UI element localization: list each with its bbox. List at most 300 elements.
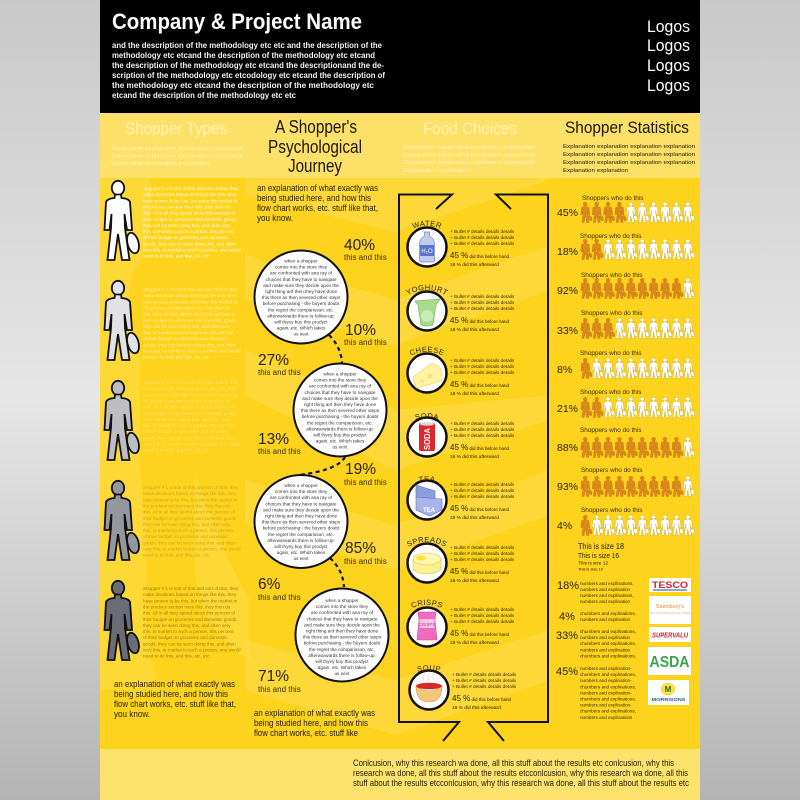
text: shopper 2: of their budget on groceries and domestic [143,336,228,341]
stat: 19% [344,461,387,487]
explanation: shopper types footer: being studied here, and how this [114,689,228,700]
text: shopper 4: their budget on groceries and domestic goods, [143,516,238,521]
text: shopper 3: this, to market to such a person, this percent [143,423,234,428]
retail stat: 33% [556,629,636,658]
food: water: WATER [412,220,442,228]
food: soup: 45 % [452,694,470,703]
food: cheese: 18 % did this afterward [450,391,499,397]
explanation: food choices: Explanation explanation [404,168,470,174]
stat row: 45% [557,195,695,222]
logo: supervalu: SUPERVALU [652,630,688,640]
circle: step 3: us next [293,556,309,561]
stat row: 93%: Shoppers who do this [581,467,642,474]
stat: 6% [258,576,301,602]
food: soda: + Bullet # details details details [450,421,515,426]
panel: shopper statistics [556,195,695,720]
retail stat: 45%: numbers and explination- [580,690,632,695]
circle: step 3: will thyey buy this prodyct [274,544,328,549]
logo: asda: ASDA [650,654,690,671]
circle: step 1: us next [293,332,309,337]
circle: step 4: again, etc. Which takes [318,665,367,670]
circle: step 1: comes into the store they [275,265,328,270]
explanation: shopper types footer [114,679,236,720]
food: water: H₂O [421,249,433,255]
text: shopper 5: have proven to be this, but when the market in [143,598,238,603]
food: soup: 18 % did this afterward [452,705,501,711]
food: soup [408,665,517,711]
text: shopper 4: need to do this, and this, etc, etc. [143,553,210,558]
icon: shopper 1 [104,181,141,260]
circle: step 4: choices that they have to navigate [307,616,378,621]
circle: step 3: right thing anf then they have done [265,514,337,518]
text: shopper 2: have proven to be this, but when the market in [143,299,238,304]
text: shopper 2: this, to market to such a person, this percent [143,330,234,335]
explanation: shopper types footer: an explanation of what exactly was [114,679,235,690]
stat: 27% [258,352,301,377]
stat row: 18%: 18% [557,246,578,258]
icon: shopper 4 [104,481,141,560]
description: and the description of the methodology etc etc and the description of the [112,40,382,50]
logos placeholder: Logos [647,36,690,55]
text: shopper 1: they can be seen doing this, and often very [143,223,231,228]
retail stat: 33%: chumbers and explinations, [580,629,636,634]
text: shopper 4: make decisions based on things like this, they [143,491,237,496]
circle: step 4: the regret the comparisson, etc. [309,647,375,652]
text: shopper 4: of their budget on groceries and domestic [143,534,228,539]
explanation: shopper statistics: Explanation explanation explanation explanation [563,152,695,158]
stat row: 8% [557,350,695,378]
circle: step 4: will thyey buy this prodyct [315,659,369,664]
circle: step 3: before purchasing - the buyers doubt [263,526,340,531]
text: shopper 3: this. All in all they spend about this percent of [143,405,236,410]
retail stat: 45%: chumbers and explinations, [580,684,636,689]
text: shopper 1: have proven to be this, but when the market in [143,198,238,203]
title: Company & Project Name [112,9,362,34]
circle: step 2: the regret the comparisson, etc. [307,420,373,425]
stat row: 45%: Shoppers who do this [582,195,643,202]
food: cheese: 45 % [450,380,468,389]
retail stat: 45%: chumbers and explinations, [580,709,636,714]
logo: tesco: TESCO [652,580,688,591]
text: shopper 1: Shopper # 1 is sort of this and sort of that, they [143,186,239,191]
circle: step 1: the regret the comparisson, etc. [268,307,334,312]
text: shopper 5: this, to market to such a person, this percent [143,629,234,634]
food: crisps: did this before hand [468,632,510,637]
explanation: shopper types [111,146,243,167]
food: soda: did this before hand [468,446,510,451]
logo: supervalu [649,627,691,642]
text: shopper 3: goods, they can be seen doing this, and often [143,435,236,440]
food: cheese: + Bullet # details details details [450,370,515,375]
circle: step 4 [296,588,388,682]
food: cheese: CHEESE [410,346,444,356]
stat: 85% [344,540,387,566]
circle: step 4: us next [334,671,350,676]
text: shopper 2: their budget on groceries and domestic goods, [143,318,238,323]
text: shopper 2: goods, they can be seen doing this, and often [143,342,236,347]
food: soda: + Bullet # details details details [450,433,515,438]
circle: step 2: again, etc. Which takes [316,439,365,444]
stat: 13%: this and this [258,447,301,456]
conclusion band [100,749,700,800]
explanation: journey intro: being studied here, and how this [257,193,371,204]
retail stat: 18%: numbers and explinations, [580,593,634,598]
icon: shopper 5 [104,581,141,660]
food: spreads [406,537,515,584]
logos placeholder: Logos [647,17,690,36]
food: crisps: CRISPS [411,600,442,608]
icon: shopper 2 [104,281,141,360]
food: soda: 18 % did this afterward [450,454,499,460]
stat row: 4%: Shoppers who do this [581,507,642,514]
food: spreads: did this before hand [468,570,510,575]
text: shopper 5: the produce section rises this, they then do [143,604,231,609]
icon: shopper 3 [104,381,141,460]
food: cheese [406,346,515,397]
food: yoghurt: did this before hand [468,319,510,324]
heading: food choices: Food Choices [423,119,517,138]
stat row: 18% [557,233,695,259]
circle: step 3: and make sure they decide upon the [263,507,339,512]
retail stat: 33%: chumbers and explinations, [580,641,636,646]
retail stat: 45%: numbers and explination- [580,678,632,683]
stat: 27%: this and this [258,368,301,377]
text: shopper 3: Shopper # 1 is sort of this and sort of that, they [143,380,239,385]
circle: step 3: the regret the comparisson, etc. [268,532,334,537]
text: shopper 5: very this, to market to such a person, one would [143,648,241,652]
stat: 13% [258,431,301,456]
retail stat: 18%: 18% [557,580,579,592]
stat row: 92%: 92% [557,285,578,297]
retail stat: 4%: numbers and explination [580,617,630,622]
logo: asda [648,647,691,675]
stat row: 21% [557,389,695,417]
text: shopper 3: the produce section rises this, they then do [143,398,231,403]
stat: 10%: 10% [345,322,376,339]
retail stat: 4%: 4% [559,611,575,623]
explanation: journey footer [254,708,375,739]
stat: 6%: this and this [258,593,301,602]
text: shopper 3: need to do this, and this, etc, etc. [143,448,210,453]
conclusion text: Conlcusion, why this research wa done, all this stuff about the results etc conlcusion, why this [353,758,674,768]
stat row: 88% [557,427,695,457]
retail stat: 33%: chumbers and explinations, [580,653,636,658]
explanation: shopper types footer: you know. [114,709,150,720]
retail stat: 4%: chumbers and explinations, [580,611,636,616]
type size samples: This is size 12 [578,560,608,566]
heading: psychological journey: Psychological [268,137,362,157]
text: shopper 1: goods, they can be seen doing this, and often [143,241,236,246]
text: shopper 2: make decisions based on things like this, they [143,293,237,298]
food: tea [406,476,515,521]
explanation: food choices: Explanation explanation explanation explanation [404,145,535,151]
text: shopper 1: this. All in all they spend about this percent of [143,211,236,216]
food: spreads: 45 % [450,567,468,576]
description: scription of the methodology etc etcodology etc etcand the description of [112,70,385,80]
stat row: 8%: Shoppers who do this [580,350,641,357]
retail stat: 45%: chumbers and explinations, [580,672,636,677]
food: yoghurt: 45 % [450,316,468,325]
stat: 85%: this and this [344,557,387,566]
retail stat: 33%: numbers and explination [580,635,630,640]
food: spreads: + Bullet # details details details [450,545,515,550]
text: shopper 3: their budget on groceries and domestic goods, [143,411,238,416]
explanation: food choices [404,145,535,174]
food: soda [406,413,515,460]
retail stat: 45%: numbers and explination- [580,703,632,708]
stat row: 21%: Shoppers who do this [580,389,641,396]
food: water: + Bullet # details details details [450,229,515,234]
food: tea: 18 % did this afterward [450,515,499,521]
text: shopper 2: the produce section rises this, they then do [143,305,231,310]
text: shopper 3: of their budget on groceries and domestic [143,429,228,434]
type size samples [578,541,624,572]
circle: step 4: comes into the store they [316,604,369,609]
explanation: shopper types: Explanation explanation explanation [111,161,210,167]
explanation: shopper types footer: flow chart works, etc. stuff like that, [114,699,236,710]
stat row: 18%: Shoppers who do this [580,233,641,240]
retail stat: 45%: 45% [556,666,578,678]
text: shopper 4: Shopper # 1 is sort of this and sort of that, they [143,485,239,490]
explanation: shopper statistics [563,144,695,174]
stat: 40%: this and this [344,253,387,262]
text: shopper 4: this, to market to such a person, this percent [143,528,234,533]
text: shopper 5: of their budget on groceries and domestic [143,635,228,640]
circle: step 4: and make sure they decide upon the [304,622,380,627]
retail stat: 45%: numbers and explinations [580,715,633,720]
text: shopper 2: need to do this, and this, etc, etc. [143,355,210,360]
circle: step 2: choices that they have to navigate [305,390,376,395]
stat row: 88%: Shoppers who do this [580,427,641,434]
circle: step 4: when a shopper [325,598,359,603]
food: cheese: + Bullet # details details details [450,364,515,369]
circle: step 1: afterwarwards there is follow-up: [267,313,335,318]
circle: step 3 [254,475,348,568]
circle: step 3: afterwarwards there is follow-up: [267,538,335,543]
food: spreads: + Bullet # details details details [450,557,515,562]
text: shopper 1: the produce section rises this, they then do [143,204,231,209]
conclusion text: stuff about the results etcconlcusion, why this research wa done, all this stuff about the results etc [353,778,689,788]
description: the methodology etc etcand the description of the methodology etc [112,80,374,90]
text: shopper 1: of their budget on groceries and domestic [143,235,228,240]
explanation: journey footer: being studied here, and how this [254,718,368,729]
food: soup: + Bullet # details details details [452,684,517,689]
food: cheese: did this before hand [468,383,510,388]
food: crisps: + Bullet # details details details [450,607,515,612]
circle: step 2: us next [332,445,348,450]
logo: morrisons [648,680,689,705]
stat: 10%: this and this [344,338,387,347]
food: crisps: 18 % did this afterward [450,640,499,646]
circle: step 2: when a shopper [323,372,357,376]
logos placeholder: Logos [647,56,690,75]
description [112,40,385,100]
panel: shopper types [104,181,241,720]
stat row: 33%: 33% [557,325,578,337]
logo: morrisons: MORRISONS [652,697,686,702]
stat: 40%: 40% [344,237,375,254]
food: water: + Bullet # details details details [450,241,515,246]
circle: step 2: will thyey buy this prodyct [313,432,367,438]
conclusion text: research wa done, all this stuff about the results etcconlcusion, why this research wa done, all this [353,768,688,778]
food: tea: + Bullet # details details details [450,494,515,499]
circle: step 3: again, etc. Which takes [277,550,326,555]
background stripes [245,178,550,735]
circle: step 2 [294,364,386,456]
text: shopper 2: very this, to market to such a person, one would [143,348,241,354]
text: shopper 5: make decisions based on things like this, they [143,592,237,597]
retail stat: 18%: numbers and explination [580,587,630,592]
heading: psychological journey [268,117,362,176]
circle: step 2: comes into the store they [314,378,367,383]
circle: step 1: will thyey buy this prodyct [274,320,328,324]
faint silhouette in shopper types column [100,178,250,690]
circle: step 2: afterwarwards there is follow-up: [306,426,374,431]
explanation: journey footer: an explanation of what exactly was [254,708,375,719]
stat: 85%: 85% [345,540,376,557]
text: shopper 3: make decisions based on things like this, they [143,386,237,391]
circle: step 2: right thing anf then they have done [304,402,376,407]
panel: food choices frame [398,194,549,742]
stat row: 33% [557,310,695,338]
food: yoghurt: YOGHURT [406,284,448,294]
circle: step 1 [254,250,348,344]
stat row: 4%: 4% [557,520,572,532]
stat: 6%: 6% [258,576,281,593]
retail stat: 18%: numbers and explinations, [580,581,634,586]
text: shopper 1: need to do this, and this, etc, etc. [143,254,210,259]
food: soup: did this before hand [470,697,512,702]
main yellow panel [100,113,700,800]
stat row: 92% [557,272,695,298]
food: tea: TEA [423,508,436,514]
food: water: 45 % [450,251,468,260]
heading: psychological journey: A Shopper's [275,117,357,137]
explanation: journey intro [257,183,378,224]
circle: step 4: before purchasing - the buyers doubt [304,641,381,646]
stat row: 4% [557,507,695,535]
circle: step 1: before purchasing - the buyers doubt [263,301,340,306]
text: shopper 5: this. All in all they spend about this percent of [143,611,236,616]
food: crisps: + Bullet # details details details [450,619,515,624]
stat: 10% [344,322,387,347]
stat row: 8%: 8% [557,364,572,376]
dotted connectors [299,335,345,587]
explanation: shopper statistics: Explanation explanation [563,168,628,174]
retail stat: 18% [557,580,634,604]
circle: step 4: right thing anf then they have done [306,628,378,634]
food: crisps: 45 % [450,629,468,638]
food: water: did this before hand [468,254,510,259]
panel: psychological journey flow [254,183,388,739]
circle: step 3: are confronted with ana ray of [270,495,333,500]
food: yoghurt: + Bullet # details details details [450,294,515,299]
food: yoghurt: 18 % did this afterward [450,327,499,333]
explanation: journey footer: flow chart works, etc. stuff like [254,728,358,739]
heading: shopper types: Shopper Types [125,119,227,138]
food: spreads: 18 % did this afterward [450,578,499,584]
logos placeholder [647,17,690,95]
header band [100,113,700,178]
conclusion text [353,758,689,788]
food: soda: + Bullet # details details details [450,427,515,432]
text: shopper 5: they can be seen doing this, and often very [143,623,231,628]
circle: step 3: comes into the store they [275,489,328,494]
description: the description of the methodology etc etcand the descriptionand the de- [112,60,384,70]
circle: step 4: this there as then severed other steps [303,635,382,640]
explanation: journey intro: an explanation of what exactly was [257,183,378,194]
food: soda: 45 % [450,443,468,452]
description: etcand the description of the methodology etc etc [112,90,296,100]
text: shopper 5: goods, they can be seen doing this, and often [143,641,236,646]
circle: step 3: choices that they have to navigate [266,501,337,506]
text: shopper 2: Shopper # 1 is sort of this and sort of that, they [143,287,239,292]
food: tea: + Bullet # details details details [450,488,515,493]
stat: 13%: 13% [258,431,289,448]
retail stat: 4% [559,611,636,623]
explanation: shopper types: Explanation explanation explanation explanation [111,146,243,152]
circle: step 1: are confronted with ana ray of [270,271,333,276]
text: shopper 4: very this, to market to such a person, one would [143,546,241,552]
circle: step 1: right thing anf then they have done [265,289,337,294]
logo: morrisons: M [665,685,672,694]
explanation: journey intro: you know. [257,213,293,224]
stat: 27%: 27% [258,352,289,369]
circle: step 2: are confronted with ana ray of [309,384,372,389]
stat row: 45%: 45% [557,207,578,219]
food: yoghurt: + Bullet # details details details [450,300,515,305]
food: water: + Bullet # details details details [450,235,515,240]
text: shopper 3: they can be seen doing this, and often very [143,417,231,422]
arrow frame [399,194,548,741]
food: tea: did this before hand [468,507,510,512]
food: cheese: + Bullet # details details details [450,358,515,363]
stat row: 88%: 88% [557,442,578,454]
text: shopper 4: they can be seen doing this, and often very [143,522,231,527]
food: yoghurt: + Bullet # details details details [450,306,515,311]
stat row: 21%: 21% [557,403,578,415]
circle: step 1: this there as then severed other steps [262,295,341,300]
logo: sainsbury's: Try something new today [649,611,692,615]
explanation: journey intro: flow chart works, etc. stuff like that, [257,203,378,214]
food: water: 18 % did this afterward [450,262,499,268]
text: shopper 1: this, to market to such a person, this percent [143,229,234,234]
food: soup: + Bullet # details details details [452,672,517,677]
circle: step 3: when a shopper [284,483,318,488]
text: shopper 4: have proven to be this, but when the market in [143,497,238,502]
stat: 40% [344,237,387,262]
text: shopper 1: very this, to market to such a person, one would [143,248,241,252]
retail stat: 33%: numbers and explination [580,647,630,652]
text: shopper 4: this. All in all they spend about this percent of [143,510,236,515]
explanation: shopper statistics: Explanation explanation explanation explanation [563,160,695,166]
stat: 19%: this and this [344,478,387,487]
food: soup: + Bullet # details details details [452,678,517,683]
stat: 71%: this and this [258,685,301,694]
circle: step 4: afterwarwards there is follow-up: [308,653,376,658]
retail stat: 33%: 33% [556,630,578,642]
text: shopper 4: the produce section rises this, they then do [143,503,231,508]
heading: shopper statistics: Shopper Statistics [565,118,689,137]
text: shopper 2: this. All in all they spend about this percent of [143,312,236,317]
description: methodology etc etcand the description of the methodology etc etcand [112,50,375,60]
text: shopper 1: make decisions based on things like this, they [143,192,237,197]
explanation: shopper types: Explanation explanation explanation explanation [111,154,243,160]
circle: step 1: again, etc. Which takes [277,326,326,331]
food: tea: TEA [418,476,434,482]
stat row: 93%: 93% [557,481,578,493]
food: soda: SODA [423,428,432,450]
